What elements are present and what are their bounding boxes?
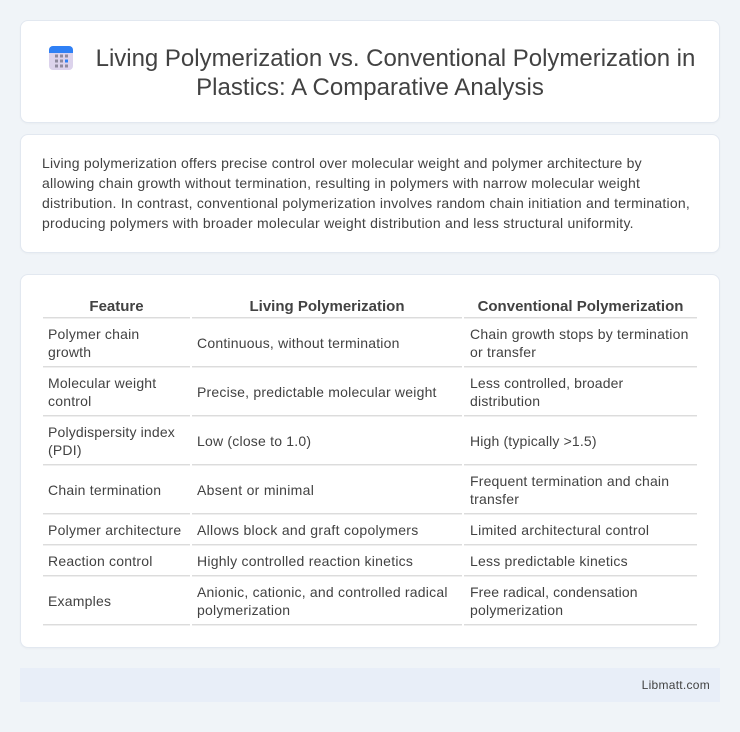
row: molecular weight control: distribution [470, 393, 540, 409]
table card [20, 274, 720, 648]
row: reaction control: Less predictable kinetics [470, 553, 628, 569]
title: Plastics: A Comparative Analysis [196, 74, 544, 101]
row: polydispersity index [48, 424, 597, 458]
row: reaction control: Reaction control [48, 553, 153, 569]
intro text: producing polymers with broader molecular weight distribution and less structural uniformity. [42, 215, 634, 231]
row: polymer architecture [48, 522, 649, 538]
icon: calendar [49, 46, 73, 70]
intro text: distribution. In contrast, conventional polymerization involves random chain initiation and termination, [42, 195, 690, 211]
row: molecular weight control: Precise, predictable molecular weight [197, 384, 437, 400]
intro text [42, 155, 690, 231]
row: examples: polymerization [197, 602, 290, 618]
row: molecular weight control: Less controlled, broader [470, 375, 623, 391]
row: reaction control: Highly controlled reaction kinetics [197, 553, 413, 569]
row: molecular weight control: control [48, 393, 92, 409]
table header: Living Polymerization [249, 298, 405, 315]
row: chain termination: Chain termination [48, 482, 161, 498]
row: polydispersity index: Low (close to 1.0) [197, 433, 311, 449]
row: polymer chain growth: Polymer chain [48, 326, 139, 342]
row: examples: Anionic, cationic, and controlled radical [197, 584, 448, 600]
intro text: Living polymerization offers precise control over molecular weight and polymer architecture by [42, 155, 642, 171]
row: chain termination [48, 473, 669, 507]
row: polymer chain growth: Chain growth stops by termination [470, 326, 689, 342]
row: polydispersity index: Polydispersity index [48, 424, 175, 440]
footer text: Libmatt.com [642, 678, 710, 692]
row: polymer architecture: Limited architectural control [470, 522, 649, 538]
row: chain termination: Frequent termination and chain [470, 473, 669, 489]
row: polymer chain growth: Continuous, without termination [197, 335, 400, 351]
row: examples [48, 584, 638, 618]
comparison table [43, 298, 697, 626]
row: molecular weight control: Molecular weight [48, 375, 156, 391]
row: polydispersity index: (PDI) [48, 442, 82, 458]
row: chain termination: transfer [470, 491, 519, 507]
row: polymer chain growth: or transfer [470, 344, 536, 360]
title [96, 45, 695, 101]
row: polymer architecture: Allows block and graft copolymers [197, 522, 419, 538]
intro card [20, 134, 720, 253]
row: polymer chain growth [48, 326, 689, 360]
table header [89, 298, 683, 315]
intro text: allowing chain growth without termination, resulting in polymers with narrow molecular weight [42, 175, 640, 191]
row: polymer chain growth: growth [48, 344, 91, 360]
footer bar [20, 668, 720, 702]
row: chain termination: Absent or minimal [197, 482, 314, 498]
row: polymer architecture: Polymer architecture [48, 522, 181, 538]
row: reaction control [48, 553, 628, 569]
row: molecular weight control [48, 375, 623, 409]
table header: Conventional Polymerization [478, 298, 683, 315]
header card [20, 20, 720, 123]
table header: Feature [89, 298, 144, 315]
row: examples: Free radical, condensation [470, 584, 638, 600]
row: polydispersity index: High (typically >1.5) [470, 433, 597, 449]
row: examples: polymerization [470, 602, 563, 618]
title: Living Polymerization vs. Conventional Polymerization in [96, 45, 695, 72]
row: examples: Examples [48, 593, 111, 609]
